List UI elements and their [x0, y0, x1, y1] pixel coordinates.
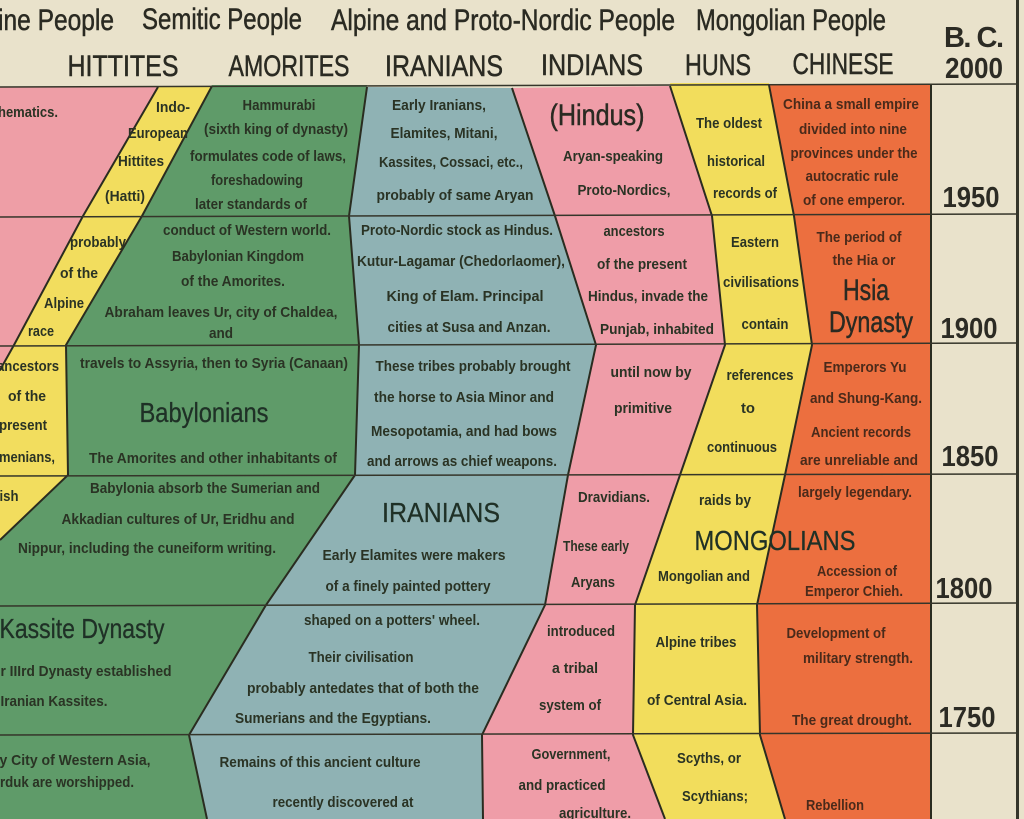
heading: nations: HITTITES — [68, 50, 178, 83]
text: pink Indians band — [518, 99, 714, 819]
text: green band: Kassite Dynasty — [0, 613, 164, 644]
text: green band: later standards of — [195, 196, 308, 213]
text: blue band: These tribes probably brought — [376, 358, 571, 375]
text: orange Chinese band: China a small empire — [783, 96, 919, 113]
text: green band: Hammurabi — [242, 97, 316, 114]
text: green band: Abraham leaves Ur, city of Chaldea, — [104, 304, 338, 321]
text: pink Indians band: Punjab, inhabited — [600, 321, 714, 338]
text: blue band: Kutur-Lagamar (Chedorlaomer), — [357, 253, 565, 270]
text: green band: Nippur, including the cuneiform writing. — [18, 540, 276, 557]
text: orange Chinese band: the Hia or — [832, 252, 896, 269]
text: yellow left band: race — [28, 323, 54, 340]
text: yellow Huns band — [647, 115, 856, 805]
text: pink left band: hematics. — [0, 104, 58, 121]
text: orange Chinese band: Ancient records — [811, 424, 911, 441]
heading: people groups: ine People — [0, 4, 114, 37]
text: pink Indians band: Proto-Nordics, — [578, 182, 670, 199]
text: yellow left band: ish — [0, 488, 18, 505]
text: pink Indians band: Government, — [532, 746, 610, 763]
text: orange Chinese band: of one emperor. — [803, 192, 905, 209]
text: blue band: and arrows as chief weapons. — [367, 453, 557, 470]
text: green band: r IIIrd Dynasty established — [0, 663, 172, 680]
text: green band: formulates code of laws, — [190, 148, 346, 165]
timeline years: 1750 — [938, 702, 996, 734]
text: orange Chinese band: Dynasty — [829, 306, 913, 339]
text: green band: (sixth king of dynasty) — [204, 121, 348, 138]
text: green band: travels to Assyria, then to Syria (Canaan) — [80, 355, 348, 372]
text: green band: and — [209, 325, 233, 342]
text: green band: of the Amorites. — [181, 273, 285, 290]
text: pink Indians band: a tribal — [552, 660, 598, 677]
text: blue band: Mesopotamia, and had bows — [371, 423, 557, 440]
text: blue band: probably of same Aryan — [376, 187, 534, 204]
text: yellow left band: of the — [8, 388, 46, 405]
text: blue band: probably antedates that of both the — [247, 680, 479, 697]
text: pink Indians band: of the present — [597, 256, 687, 273]
text: pink Indians band: primitive — [614, 400, 672, 417]
text: orange Chinese band: Rebellion — [806, 797, 864, 814]
text: orange Chinese band: and Shung-Kang. — [810, 390, 922, 407]
heading: people groups: Alpine and Proto-Nordic People — [331, 4, 675, 37]
text: green band: conduct of Western world. — [163, 222, 331, 239]
text: blue band: Elamites, Mitani, — [390, 125, 498, 142]
text: green band: Babylonia absorb the Sumerian and — [90, 480, 320, 497]
text: pink Indians band: introduced — [547, 623, 615, 640]
text: yellow Huns band: raids by — [699, 492, 752, 509]
heading: nations: CHINESE — [792, 48, 894, 81]
text: yellow Huns band: Alpine tribes — [656, 634, 736, 651]
heading: people groups — [0, 3, 886, 37]
band: yellow Huns and Mongolians — [633, 83, 812, 819]
text: orange Chinese band: The period of — [816, 229, 902, 246]
text: blue band: of a finely painted pottery — [326, 578, 491, 595]
text: green band: The Amorites and other inhabitants of — [89, 450, 338, 467]
timeline years — [936, 22, 1004, 734]
timeline years: 2000 — [945, 53, 1003, 85]
text: yellow left band: menians, — [0, 449, 55, 466]
text: yellow left band: of the — [60, 265, 98, 282]
text: pink Indians band: until now by — [610, 364, 692, 381]
text: green band: y City of Western Asia, — [0, 752, 150, 769]
text: orange Chinese band — [783, 96, 922, 814]
band: pink Hittite-neighbour people — [0, 87, 158, 370]
text: orange Chinese band: are unreliable and — [800, 452, 918, 469]
text: orange Chinese band: military strength. — [803, 650, 913, 667]
heading: nations: IRANIANS — [385, 50, 503, 83]
text: blue band: Kassites, Cossaci, etc., — [379, 154, 523, 171]
text: blue band: Remains of this ancient culture — [220, 754, 420, 771]
text: blue band: King of Elam. Principal — [386, 288, 544, 305]
band: yellow Hittites and Alpine race — [0, 86, 212, 540]
heading: nations — [68, 48, 894, 83]
text: yellow Huns band: historical — [707, 153, 765, 170]
text: yellow Huns band: Eastern — [731, 234, 779, 251]
heading: people groups: Semitic People — [142, 3, 302, 36]
text: yellow Huns band: Scythians; — [682, 788, 748, 805]
text: pink Indians band: Aryan-speaking — [563, 148, 663, 165]
text: orange Chinese band: Development of — [786, 625, 886, 642]
text: yellow left band: Alpine — [44, 295, 84, 312]
timeline years: B. C. — [944, 22, 1004, 54]
text: orange Chinese band: Hsia — [843, 274, 889, 307]
text: green band: Akkadian cultures of Ur, Eridhu and — [62, 511, 294, 528]
text: blue band: the horse to Asia Minor and — [374, 389, 554, 406]
band: blue Iranians — [189, 87, 596, 819]
text: orange Chinese band: largely legendary. — [798, 484, 912, 501]
text: pink Indians band: Dravidians. — [578, 489, 650, 506]
text: green band: Babylonian Kingdom — [172, 248, 304, 265]
text: yellow left band: Indo- — [156, 99, 190, 116]
text: yellow Huns band: contain — [742, 316, 788, 333]
text: pink Indians band: Aryans — [571, 574, 615, 591]
heading: nations: INDIANS — [541, 49, 643, 82]
text: green band: Iranian Kassites. — [0, 693, 108, 710]
text: orange Chinese band: divided into nine — [799, 121, 907, 138]
text: yellow Huns band: to — [741, 400, 755, 417]
text: blue band: Early Iranians, — [392, 97, 486, 114]
text: blue band — [220, 97, 571, 811]
text: yellow left band: Hittites — [118, 153, 164, 170]
timeline years: 1850 — [942, 441, 998, 473]
text: yellow left band — [0, 99, 190, 505]
text: pink Indians band: These early — [563, 538, 630, 555]
text: yellow left band: probably — [70, 234, 127, 251]
text: pink Indians band: and practiced — [518, 777, 606, 794]
text: yellow Huns band: MONGOLIANS — [694, 525, 856, 556]
text: blue band: shaped on a potters' wheel. — [304, 612, 480, 629]
text: green band: Babylonians — [140, 397, 268, 428]
text: yellow Huns band: civilisations — [723, 274, 799, 291]
heading: nations: HUNS — [685, 49, 751, 82]
text: yellow Huns band: records of — [713, 185, 778, 202]
text: pink Indians band: system of — [539, 697, 602, 714]
timeline years: 1950 — [942, 182, 1000, 214]
text: yellow Huns band: Scyths, or — [677, 750, 741, 767]
text: pink Indians band: Hindus, invade the — [588, 288, 708, 305]
text: blue band: cities at Susa and Anzan. — [388, 319, 550, 336]
text: blue band: Their civilisation — [308, 649, 414, 666]
heading: people groups: Mongolian People — [696, 4, 886, 37]
text: yellow Huns band: of Central Asia. — [647, 692, 747, 709]
band: orange Chinese — [757, 84, 931, 819]
text: yellow left band: present — [0, 417, 47, 434]
band: green Amorites and Babylonians — [0, 85, 367, 819]
text: yellow Huns band: The oldest — [696, 115, 762, 132]
timeline years: 1800 — [936, 573, 992, 605]
right border — [1016, 0, 1019, 819]
text: yellow Huns band: continuous — [707, 439, 777, 456]
text: orange Chinese band: Emperors Yu — [824, 359, 906, 376]
century grid lines — [0, 84, 1017, 735]
text: blue band: Proto-Nordic stock as Hindus. — [361, 222, 553, 239]
text: orange Chinese band: The great drought. — [792, 712, 912, 729]
text: yellow Huns band: references — [726, 367, 794, 384]
text: yellow left band: European — [128, 125, 188, 142]
text: pink Indians band: ancestors — [604, 223, 664, 240]
band: pink Indians — [482, 86, 725, 819]
text: blue band: Early Elamites were makers — [322, 547, 506, 564]
text: green band — [0, 97, 348, 791]
text: green band: foreshadowing — [211, 172, 303, 189]
text: green band: rduk are worshipped. — [0, 774, 134, 791]
text: blue band: Sumerians and the Egyptians. — [235, 710, 431, 727]
text: orange Chinese band: autocratic rule — [806, 168, 898, 185]
text: blue band: recently discovered at — [272, 794, 414, 811]
text: blue band: IRANIANS — [382, 497, 500, 528]
heading: nations: AMORITES — [228, 50, 350, 83]
timeline years: 1900 — [940, 313, 998, 345]
text: yellow left band: (Hatti) — [105, 188, 145, 205]
text: orange Chinese band: provinces under the — [790, 145, 918, 162]
text: orange Chinese band: Accession of — [817, 563, 898, 580]
text: yellow Huns band: Mongolian and — [658, 568, 750, 585]
text: pink Indians band: (Hindus) — [550, 99, 644, 132]
text: orange Chinese band: Emperor Chieh. — [805, 583, 903, 600]
